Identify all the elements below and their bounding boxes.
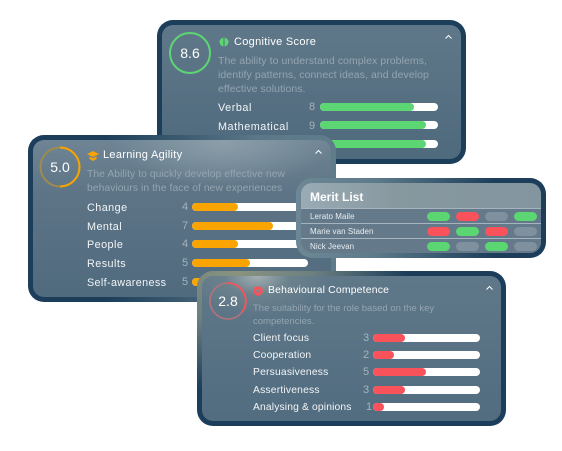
label: assertiveness: Assertiveness (253, 385, 320, 396)
cognitive description (218, 55, 429, 95)
icon: collapse chevron (486, 286, 493, 290)
learning agility description: The Ability to quickly develop effective new (87, 169, 285, 180)
status pills (427, 242, 537, 251)
learning agility ring (40, 146, 80, 188)
label: self-awareness: Self-awareness (87, 277, 166, 289)
label: change: Change (87, 202, 128, 214)
icon: gear (253, 286, 263, 296)
icon: graduation cap (87, 151, 99, 161)
value: verbal: 8 (309, 101, 315, 113)
status pills (427, 227, 537, 236)
heading: learning agility: Learning Agility (103, 149, 182, 161)
panel: cognitive score (157, 20, 466, 164)
label: verbal: Verbal (218, 102, 252, 114)
behavioural competence ring: 2.8 (218, 293, 238, 309)
learning agility description (87, 169, 285, 194)
bar: results (192, 259, 308, 267)
bar: persuasiveness (373, 368, 480, 376)
row: Nick Jeevan (301, 238, 541, 253)
status pills (427, 212, 537, 221)
value: people: 4 (182, 238, 188, 250)
heading: cognitive score: Cognitive Score (234, 36, 316, 48)
bar: mathematical (320, 121, 438, 129)
heading: merit list: Merit List (310, 190, 363, 204)
row: Marie van Staden (301, 223, 541, 238)
behavioural description (253, 303, 434, 327)
label: mental: Mental (87, 221, 122, 233)
panel: learning agility (28, 135, 336, 302)
label: results: Results (87, 258, 126, 270)
value: self-awareness: 5 (182, 276, 188, 288)
bar: cooperation (373, 351, 480, 359)
bar: people (192, 240, 308, 248)
label: cooperation: Cooperation (253, 350, 311, 361)
panel: merit list (296, 178, 546, 258)
icon: collapse chevron (445, 34, 452, 39)
label: persuasiveness: Persuasiveness (253, 367, 328, 378)
value: assertiveness: 3 (363, 384, 369, 396)
value: change: 4 (182, 201, 188, 213)
label: client focus: Client focus (253, 333, 309, 344)
value: results: 5 (182, 257, 188, 269)
name: Nick Jeevan: Nick Jeevan (310, 242, 354, 251)
bar: assertiveness (373, 386, 480, 394)
cognitive score ring: 8.6 (180, 45, 200, 61)
bar: verbal (320, 103, 438, 111)
value: persuasiveness: 5 (363, 366, 369, 378)
label: mathematical: Mathematical (218, 121, 289, 133)
bar: mental (192, 222, 308, 230)
bar: self-awareness (192, 278, 308, 286)
cognitive description: The ability to understand complex problems, (218, 55, 427, 67)
learning agility description: behaviours in the face of new experiences (87, 183, 282, 194)
value: mathematical: 9 (309, 120, 315, 132)
cognitive description: identify patterns, connect ideas, and develop (218, 69, 429, 81)
learning agility ring: 5.0 (50, 159, 70, 175)
label: people: People (87, 239, 123, 251)
icon: brain (220, 37, 228, 46)
heading: behavioural competence: Behavioural Competence (268, 285, 389, 296)
value: cooperation: 2 (363, 349, 369, 361)
panel: behavioural competence (197, 271, 506, 426)
label: analysing & opinions: Analysing & opinions (253, 402, 352, 413)
icon: collapse chevron (315, 150, 322, 154)
behavioural description: competencies. (253, 316, 314, 327)
name: Lerato Maile: Lerato Maile (310, 212, 355, 221)
name: Marie van Staden: Marie van Staden (310, 227, 374, 236)
bar: analysing & opinions (373, 403, 480, 411)
value: mental: 7 (182, 220, 188, 232)
row: Lerato Maile (301, 208, 541, 223)
bar: change (192, 203, 308, 211)
behavioural description: The suitability for the role based on the key (253, 303, 434, 314)
bar: client focus (373, 334, 480, 342)
value: analysing & opinions: 1 (366, 401, 372, 413)
cognitive score ring (169, 32, 211, 74)
cognitive description: effective solutions. (218, 83, 306, 95)
behavioural competence ring (209, 282, 247, 320)
value: client focus: 3 (363, 332, 369, 344)
bar: third skill (320, 140, 438, 148)
